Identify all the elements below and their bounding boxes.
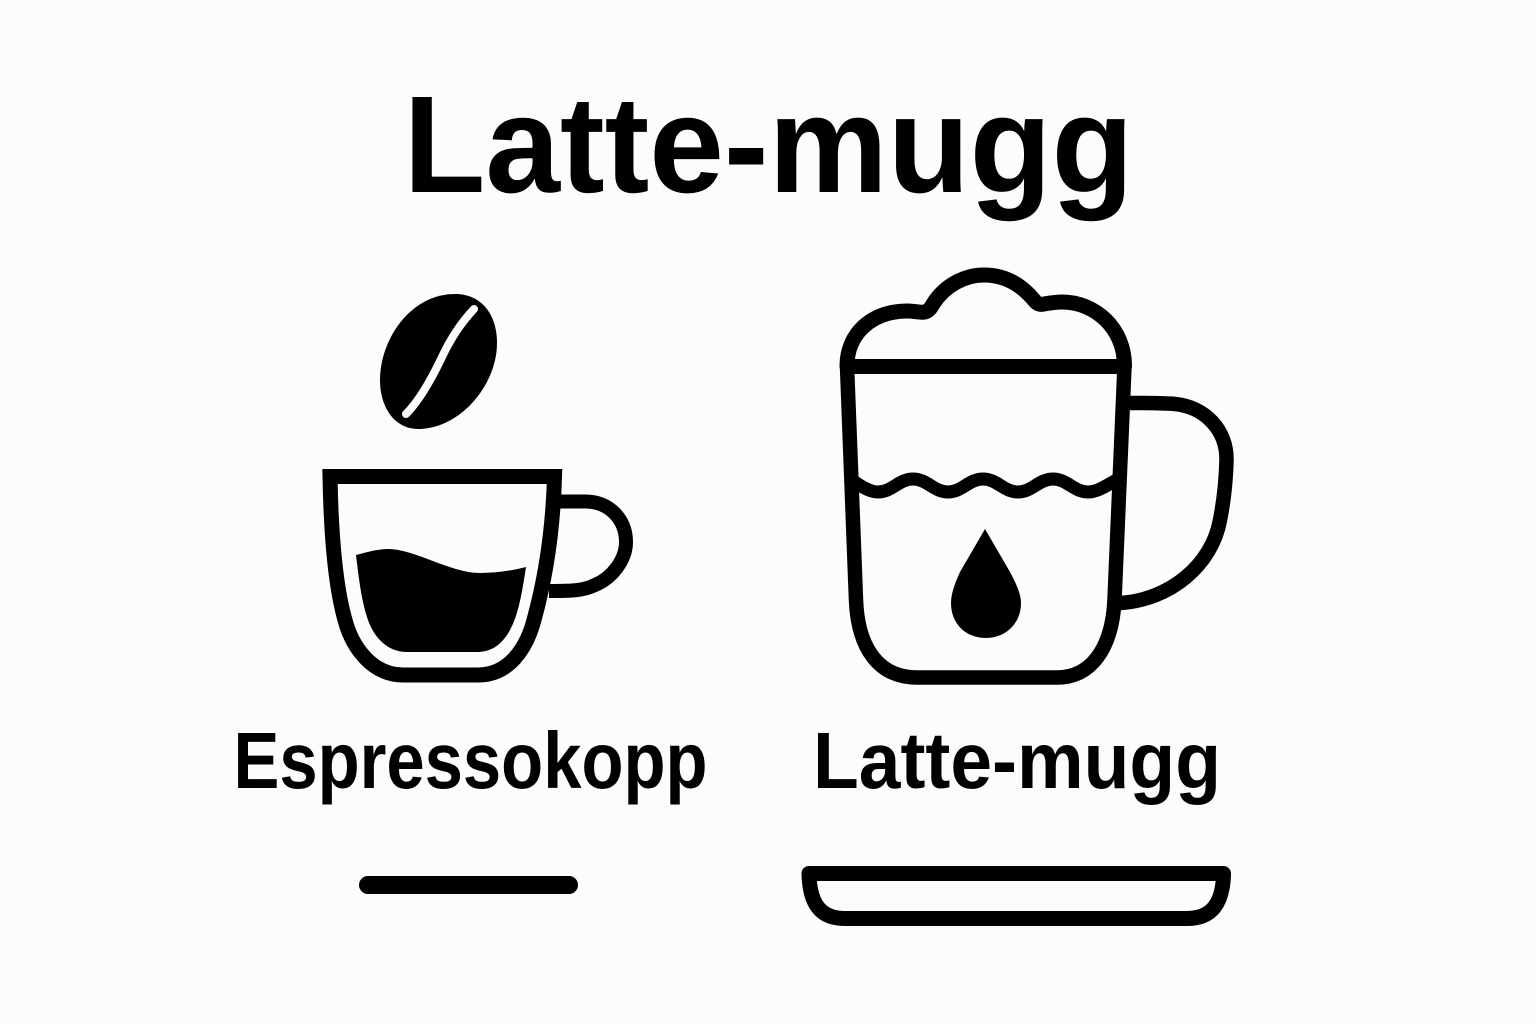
icon: espresso cup	[330, 476, 626, 675]
saucer: latte	[809, 874, 1224, 918]
label: Espressokopp: Espressokopp	[234, 716, 708, 805]
saucer: espresso	[359, 876, 578, 894]
title: Latte-mugg	[404, 68, 1134, 222]
label: Latte-mugg: Latte-mugg	[813, 716, 1221, 805]
icon: latte mug	[847, 275, 1227, 678]
icon: coffee bean	[380, 294, 497, 429]
